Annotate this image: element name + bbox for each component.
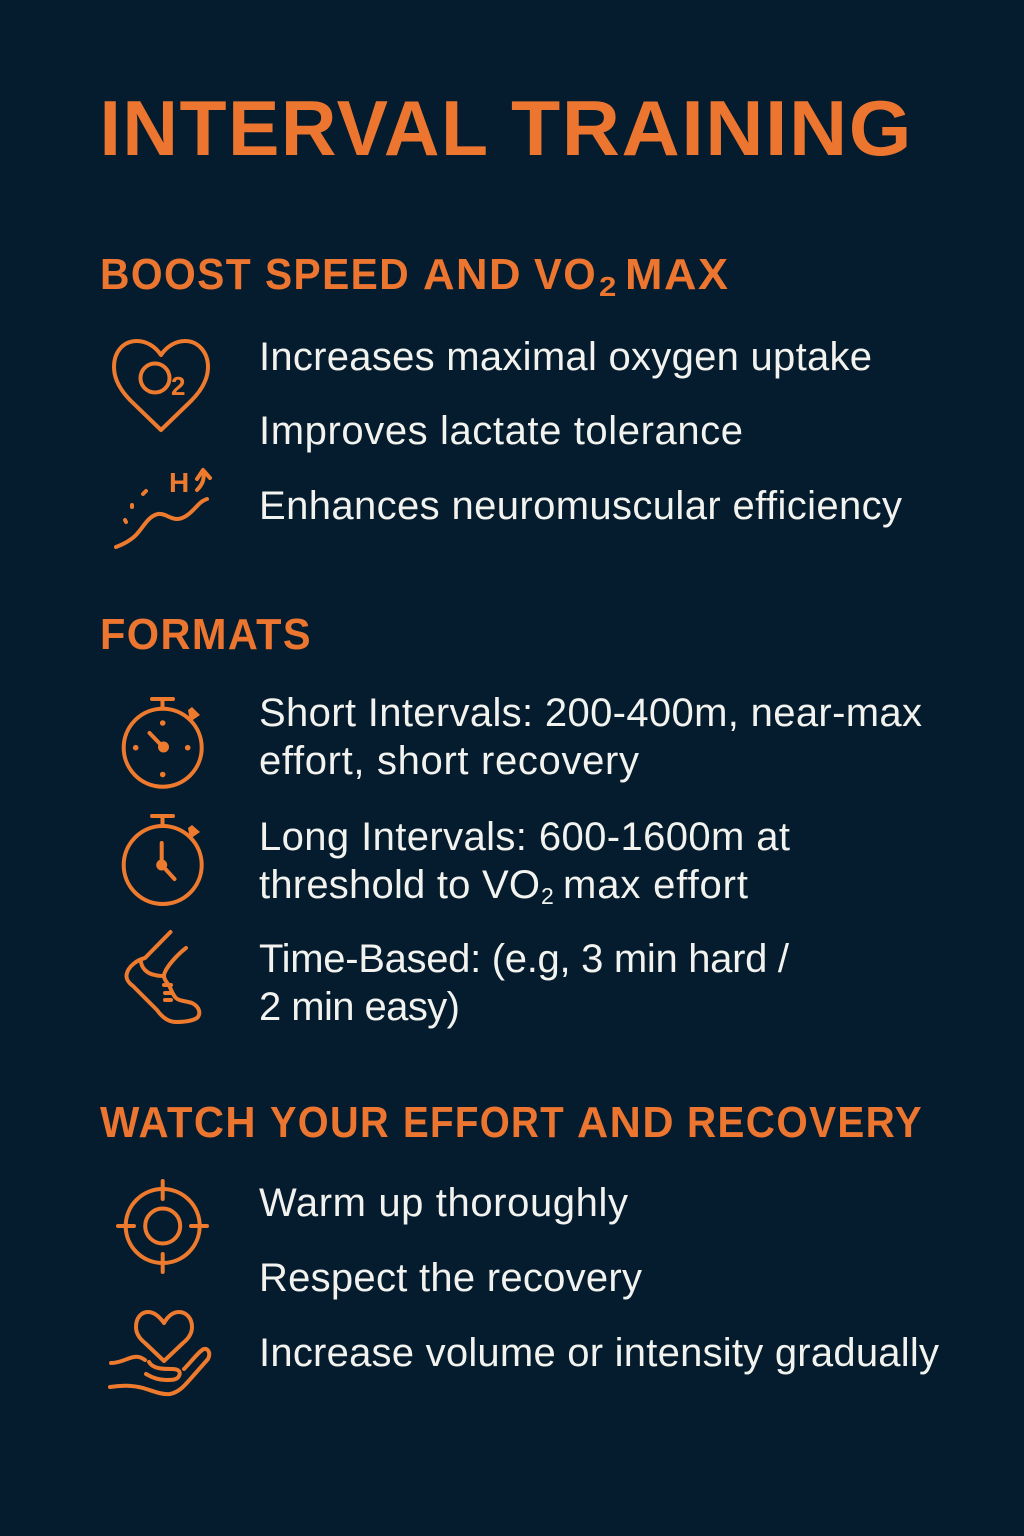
- icon: stopwatch with dots: [124, 699, 202, 787]
- heading: boost speed: AND: [423, 250, 522, 299]
- heading: watch your effort: WATCH: [100, 1098, 257, 1147]
- icon: heart on open hand: [110, 1312, 209, 1394]
- heading: boost speed: SPEED: [265, 250, 410, 299]
- text: oxygen uptake: Increases maximal oxygen uptake: [259, 335, 872, 379]
- text: long intervals: threshold to VO: [259, 863, 540, 907]
- heading: boost speed: [100, 250, 730, 302]
- title: TRAINING: [511, 84, 913, 172]
- text: lactate tolerance: Improves lactate tolerance: [259, 409, 743, 453]
- text: time-based: Time-Based: (e.g, 3 min hard /: [259, 937, 790, 981]
- text: long intervals: Long Intervals: 600-1600m at: [259, 815, 790, 859]
- text: short intervals: [259, 691, 922, 783]
- text: short intervals: Short Intervals: 200-400m, near-max: [259, 691, 922, 735]
- text: time-based: 2 min easy): [259, 985, 460, 1029]
- text: long intervals: max effort: [563, 863, 748, 907]
- heading: formats: FORMATS: [100, 610, 312, 659]
- icon: rising curve with H and arrow: [116, 467, 210, 547]
- text: increase volume: Increase volume or intensity gradually: [259, 1331, 939, 1375]
- text: warm up: Warm up thoroughly: [259, 1181, 628, 1225]
- icon: target: [118, 1181, 207, 1272]
- heading: watch your effort: EFFORT: [403, 1098, 565, 1147]
- text: time-based: [259, 937, 790, 1029]
- heading: watch your effort: [100, 1098, 923, 1147]
- icon: stopwatch with clock hands: [124, 816, 202, 904]
- heading: boost speed: VO: [534, 250, 597, 299]
- icon: heart with O2: 2: [171, 371, 185, 401]
- text: neuromuscular efficiency: Enhances neuromuscular efficiency: [259, 484, 902, 528]
- text: long intervals: [259, 815, 790, 909]
- title: [100, 84, 913, 172]
- heading: watch your effort: AND: [577, 1098, 675, 1147]
- heading: boost speed: MAX: [625, 250, 730, 299]
- heading: boost speed: 2: [599, 271, 618, 302]
- heading: watch your effort: YOUR: [270, 1098, 390, 1147]
- text: respect recovery: Respect the recovery: [259, 1256, 642, 1300]
- section: formats: [100, 610, 922, 1029]
- text: long intervals: 2: [541, 883, 554, 909]
- heading: boost speed: BOOST: [100, 250, 252, 299]
- title: INTERVAL: [100, 84, 490, 172]
- icon: heart with O2: [114, 341, 208, 430]
- section: watch your effort and recovery: [100, 1098, 939, 1394]
- icon: running shoe: [126, 932, 199, 1022]
- heading: watch your effort: RECOVERY: [687, 1098, 923, 1147]
- text: short intervals: effort, short recovery: [259, 739, 639, 783]
- icon: rising curve with H and arrow: H: [169, 467, 189, 498]
- section: boost speed and VO2 max: [100, 250, 902, 547]
